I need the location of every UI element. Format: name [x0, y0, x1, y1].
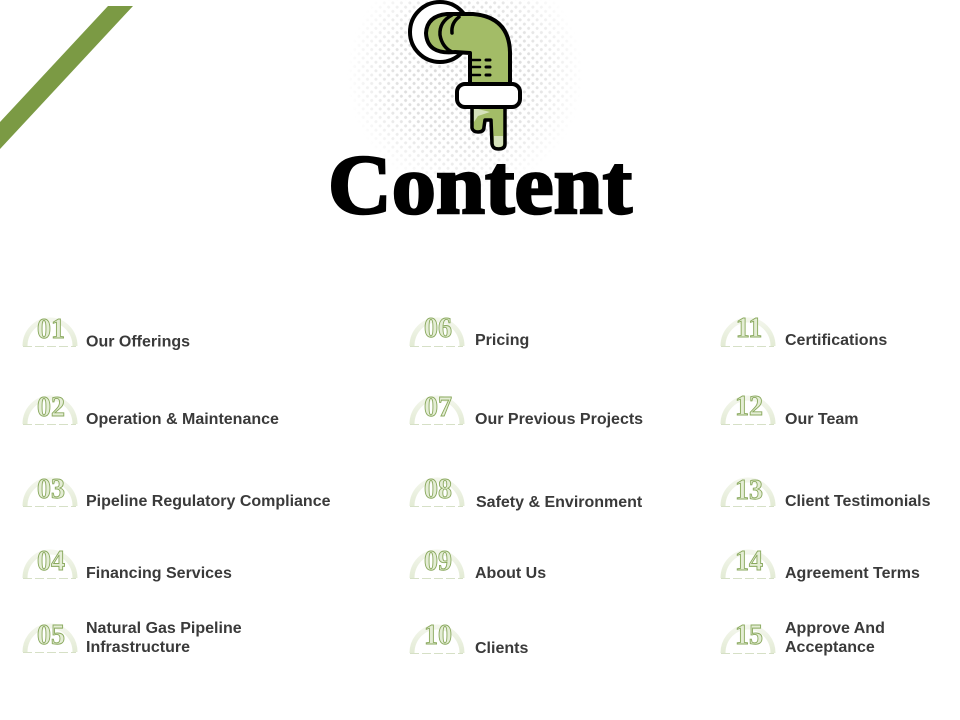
corner ribbon [0, 6, 133, 149]
item 11: Certifications [785, 332, 887, 349]
item 13 [721, 475, 931, 510]
item 03: 03 [37, 474, 65, 505]
item 10 [410, 620, 528, 657]
item 07: Our Previous Projects [475, 411, 643, 428]
item 14 [721, 546, 920, 582]
item 03 [23, 474, 331, 510]
item 15 [721, 620, 885, 656]
item 02 [23, 392, 279, 428]
item 12: Our Team [785, 411, 858, 428]
item 13: 13 [735, 475, 763, 506]
item 06: Pricing [475, 332, 529, 349]
item 10: Clients [475, 640, 528, 657]
item 07: 07 [424, 392, 452, 423]
item 15: Approve And [785, 620, 885, 637]
item 13: Client Testimonials [785, 493, 931, 510]
item 02: 02 [37, 392, 65, 423]
item 08: 08 [424, 474, 452, 505]
title: Content [328, 138, 632, 232]
item 01: 01 [37, 314, 65, 345]
item 04: 04 [37, 546, 65, 577]
item 01: Our Offerings [86, 333, 190, 350]
item 11 [721, 313, 887, 349]
halftone circle [358, 0, 572, 182]
item 06: 06 [424, 313, 452, 344]
item 05: Natural Gas Pipeline [86, 620, 242, 637]
item 15: Acceptance [785, 639, 875, 656]
item 12: 12 [735, 391, 763, 422]
item 04 [23, 546, 232, 582]
item 05: Infrastructure [86, 639, 190, 656]
item 14: 14 [735, 546, 763, 577]
item 08 [410, 474, 643, 511]
item 05 [23, 620, 242, 656]
item 10: 10 [424, 620, 452, 651]
item 06 [410, 313, 529, 349]
item 04: Financing Services [86, 565, 232, 582]
item 02: Operation & Maintenance [86, 411, 279, 428]
item 14: Agreement Terms [785, 565, 920, 582]
item 07 [410, 392, 643, 428]
item 15: 15 [735, 620, 763, 651]
item 09: 09 [424, 546, 452, 577]
icon: leaking pipe [410, 2, 520, 149]
item 03: Pipeline Regulatory Compliance [86, 493, 331, 510]
item 09 [410, 546, 546, 582]
item 08: Safety & Environment [476, 494, 643, 511]
item 09: About Us [475, 565, 546, 582]
item 05: 05 [37, 620, 65, 651]
item 01 [23, 314, 190, 350]
item 12 [721, 391, 858, 428]
item 11: 11 [736, 313, 762, 344]
